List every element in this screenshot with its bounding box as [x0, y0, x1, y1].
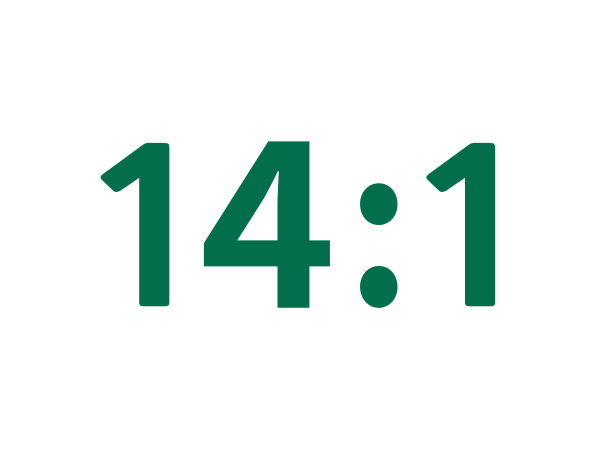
- ratio heading: 14:1: :: [346, 51, 412, 368]
- ratio heading: 14:1: 1: [67, 127, 230, 338]
- ratio heading: 14:1: [67, 40, 556, 374]
- ratio heading: 14:1: 4: [199, 40, 336, 374]
- ratio heading: 14:1: 1: [393, 127, 556, 338]
